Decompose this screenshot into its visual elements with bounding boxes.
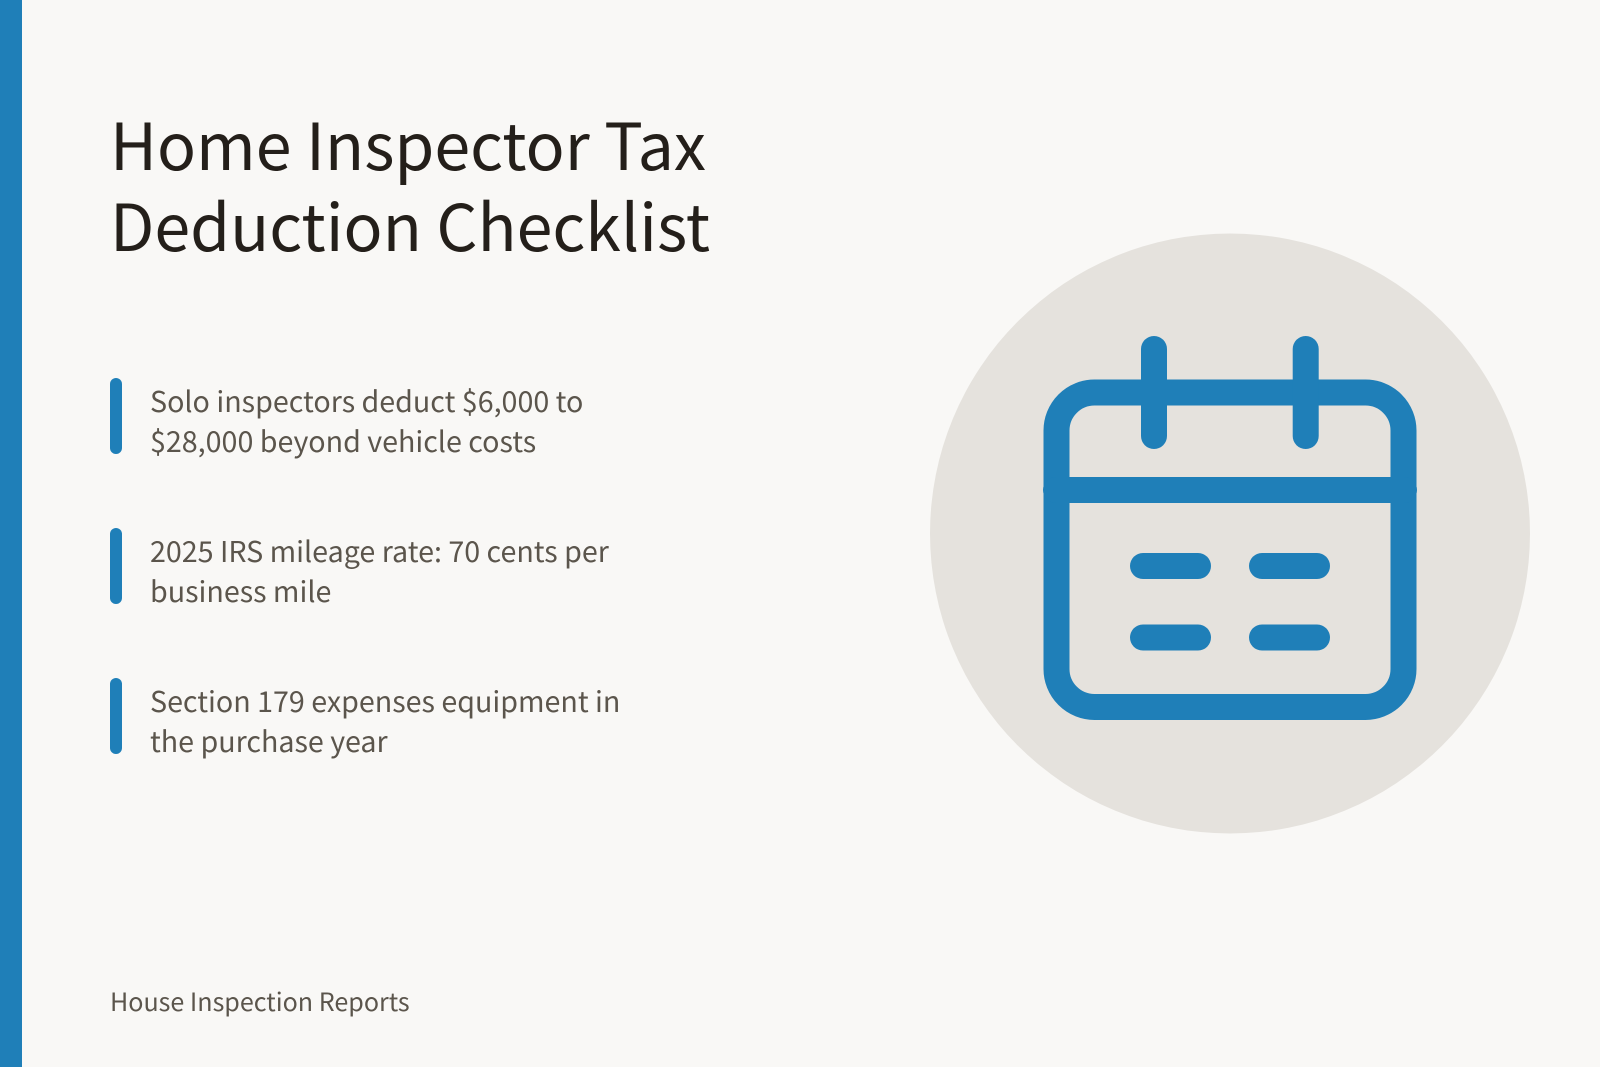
title [110, 95, 710, 270]
title: Deduction Checklist [110, 176, 710, 270]
icon: calendar in circle [930, 234, 1530, 834]
bullet: mileage rate: business mile [150, 570, 331, 611]
bullet: section 179: the purchase year [150, 720, 388, 761]
bullet list [110, 378, 620, 761]
bullet: section 179: Section 179 expenses equipment in [150, 680, 620, 721]
bullet: section 179 [110, 678, 620, 761]
title: Home Inspector Tax [110, 95, 706, 189]
left accent bar [0, 0, 22, 1067]
bullet: solo inspectors: Solo inspectors deduct $6,000 to [150, 380, 583, 421]
bullet: mileage rate: 2025 IRS mileage rate: 70 cents per [150, 530, 609, 571]
footer source: House Inspection Reports [110, 983, 410, 1019]
bullet: solo inspectors [110, 378, 583, 461]
bullet: mileage rate [110, 528, 609, 611]
bullet: solo inspectors: $28,000 beyond vehicle costs [150, 420, 536, 461]
